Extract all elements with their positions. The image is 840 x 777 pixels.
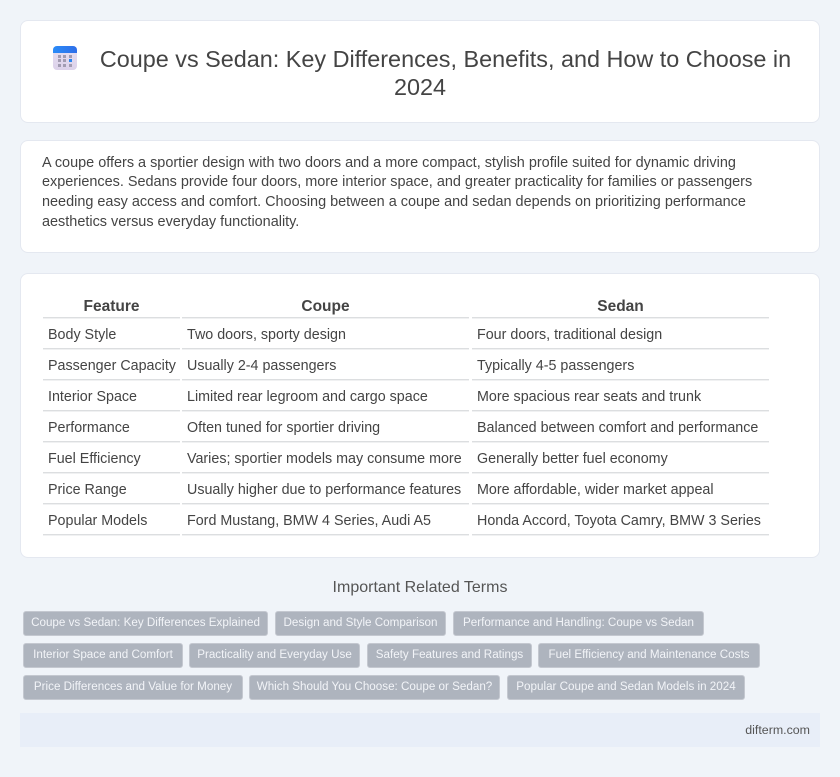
tag group: related terms: Interior Space and Comfort — [33, 648, 173, 661]
panel: comparison table — [20, 273, 820, 558]
comparison table: Performance — [48, 420, 130, 436]
comparison table: Typically 4-5 passengers — [477, 358, 634, 374]
tag group: related terms: Popular Coupe and Sedan Models in 2024 — [516, 680, 736, 693]
tag group: related terms: Which Should You Choose: Coupe or Sedan? — [257, 680, 492, 693]
tag group: related terms: Coupe vs Sedan: Key Differences Explained — [31, 616, 260, 629]
tag group: related terms — [23, 611, 760, 700]
comparison table: Body Style — [48, 327, 116, 343]
title — [100, 46, 791, 100]
comparison table: Honda Accord, Toyota Camry, BMW 3 Series — [477, 513, 761, 529]
comparison table: Coupe — [301, 298, 350, 315]
icon: calendar grid — [53, 46, 77, 70]
panel: intro — [20, 140, 820, 253]
comparison table: More affordable, wider market appeal — [477, 482, 714, 498]
comparison table: Feature — [84, 298, 140, 315]
tag group: related terms: Fuel Efficiency and Maintenance Costs — [548, 648, 750, 661]
comparison table — [43, 298, 769, 536]
comparison table: Limited rear legroom and cargo space — [187, 389, 428, 405]
footer — [20, 713, 820, 747]
tag group: related terms: Safety Features and Ratings — [376, 648, 523, 661]
heading: related terms: Important Related Terms — [333, 579, 507, 596]
text block: intro paragraph: experiences. Sedans provide four doors, more interior space, and greater practicality for families or passengers — [42, 174, 752, 190]
tag group: related terms: Performance and Handling: Coupe vs Sedan — [463, 616, 694, 629]
text block: intro paragraph: aesthetics versus everyday functionality. — [42, 214, 299, 230]
comparison table: Passenger Capacity — [48, 358, 176, 374]
comparison table: Fuel Efficiency — [48, 451, 141, 467]
title: 2024 — [394, 74, 446, 100]
panel: header — [20, 20, 820, 123]
text block: intro paragraph: needing easy access and comfort. Choosing between a coupe and sedan depends on prioritizing performance — [42, 194, 746, 210]
tag group: related terms: Practicality and Everyday Use — [197, 648, 352, 661]
comparison table: Generally better fuel economy — [477, 451, 668, 467]
text block: intro paragraph: A coupe offers a sportier design with two doors and a more compact, stylish profile suited for dynamic driving — [42, 154, 736, 170]
comparison table: Popular Models — [48, 513, 147, 529]
tag group: related terms: Price Differences and Value for Money — [34, 680, 232, 693]
text: site credit: difterm.com — [745, 723, 810, 737]
comparison table: Often tuned for sportier driving — [187, 420, 380, 436]
comparison table: Ford Mustang, BMW 4 Series, Audi A5 — [187, 513, 431, 529]
comparison table: Four doors, traditional design — [477, 327, 662, 343]
tag group: related terms: Design and Style Comparison — [284, 616, 438, 629]
comparison table: Varies; sportier models may consume more — [187, 451, 462, 467]
comparison table: Interior Space — [48, 389, 137, 405]
comparison table: Sedan — [597, 298, 644, 315]
comparison table: Usually 2-4 passengers — [187, 358, 336, 374]
comparison table: Balanced between comfort and performance — [477, 420, 758, 436]
comparison table: Two doors, sporty design — [187, 327, 346, 343]
comparison table: Usually higher due to performance features — [187, 482, 461, 498]
text block: intro paragraph — [42, 154, 752, 230]
comparison table: Price Range — [48, 482, 127, 498]
comparison table: More spacious rear seats and trunk — [477, 389, 701, 405]
title: Coupe vs Sedan: Key Differences, Benefits, and How to Choose in — [100, 46, 791, 72]
